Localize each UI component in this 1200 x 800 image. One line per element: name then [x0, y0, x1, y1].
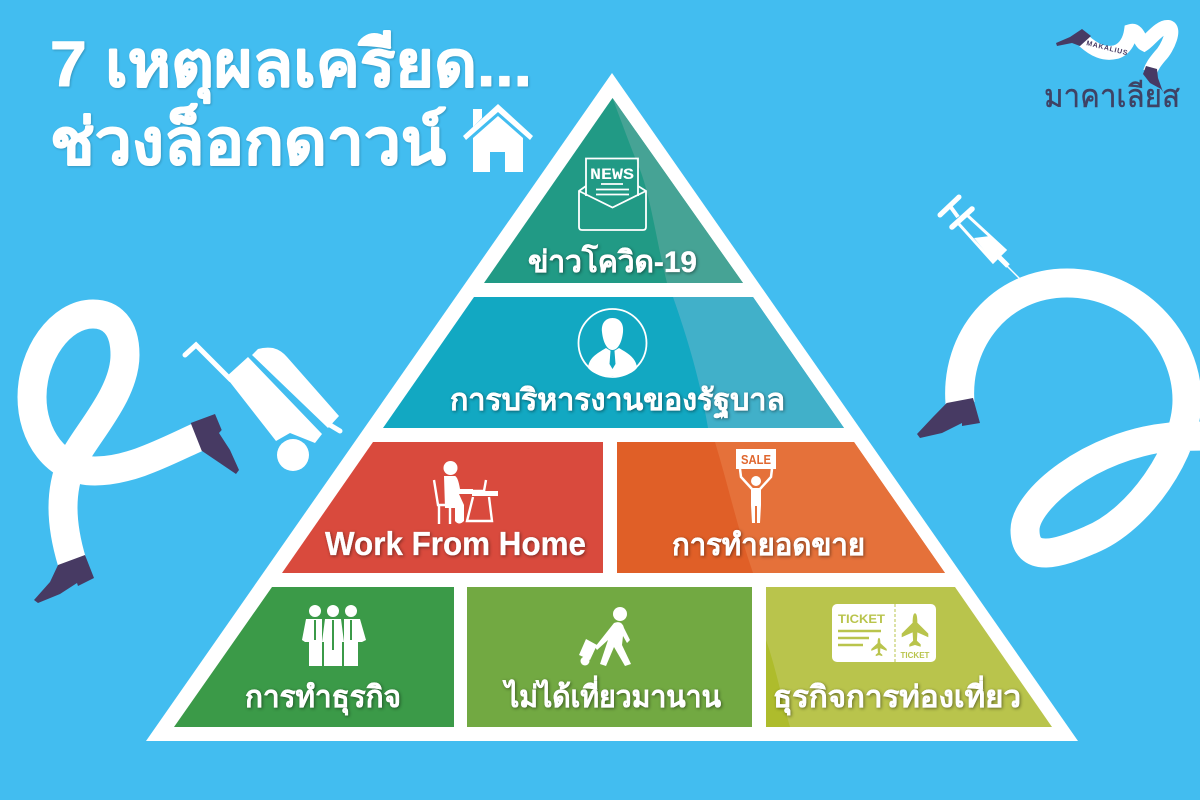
icon: traveller with luggage: [579, 607, 631, 666]
panel: ไม่ได้เที่ยวมานาน: ไม่ได้เที่ยวมานาน: [502, 675, 721, 714]
logo: Makalius: [1044, 27, 1180, 114]
title: [50, 28, 532, 178]
pyramid: [146, 73, 1078, 741]
right leg: [917, 283, 1200, 553]
title: ช่วงล็อกดาวน์: [50, 104, 447, 178]
panel: การบริหารงานของรัฐบาล: การบริหารงานของรัฐบาล: [450, 384, 785, 420]
icon: house: [463, 104, 533, 172]
icon: person holding sale sign: [736, 449, 776, 523]
left walking leg: [32, 314, 239, 603]
icon: person at desk: [434, 461, 498, 524]
icon: news envelope: [579, 158, 646, 230]
icon: person in circle: [578, 309, 646, 377]
icon: three business people: [302, 605, 366, 666]
panel: การทำธุรกิจ: [174, 587, 454, 727]
title: 7 เหตุผลเครียด...: [50, 28, 532, 104]
panel: การบริหารงานของรัฐบาล: [383, 297, 844, 428]
panel: การทำยอดขาย: การทำยอดขาย: [672, 529, 865, 562]
icon: news envelope: NEWS: [590, 166, 634, 184]
icon: ticket: [832, 604, 936, 662]
panel: ข่าวโควิด-19: [484, 98, 743, 283]
panel: ไม่ได้เที่ยวมานาน: [467, 587, 752, 727]
panel: Work From Home: Work From Home: [325, 525, 586, 562]
icon: suitcase: [185, 345, 340, 471]
panel: ธุรกิจการท่องเที่ยว: ธุรกิจการท่องเที่ยว: [773, 675, 1021, 716]
panel: การทำธุรกิจ: การทำธุรกิจ: [245, 681, 401, 716]
logo: Makalius: มาคาเลียส: [1044, 78, 1180, 114]
icon: syringe: [940, 197, 1021, 280]
panel: ธุรกิจการท่องเที่ยว: [766, 587, 1052, 727]
logo: Makalius: MAKALIUS: [1086, 40, 1128, 57]
icon: ticket: TICKET: [838, 612, 886, 626]
icon: ticket: TICKET: [901, 651, 930, 660]
icon: person holding sale sign: SALE: [741, 452, 771, 467]
panel: ข่าวโควิด-19: ข่าวโควิด-19: [528, 243, 697, 279]
panel: Work From Home: [282, 442, 603, 573]
panel: การทำยอดขาย: [617, 442, 945, 573]
